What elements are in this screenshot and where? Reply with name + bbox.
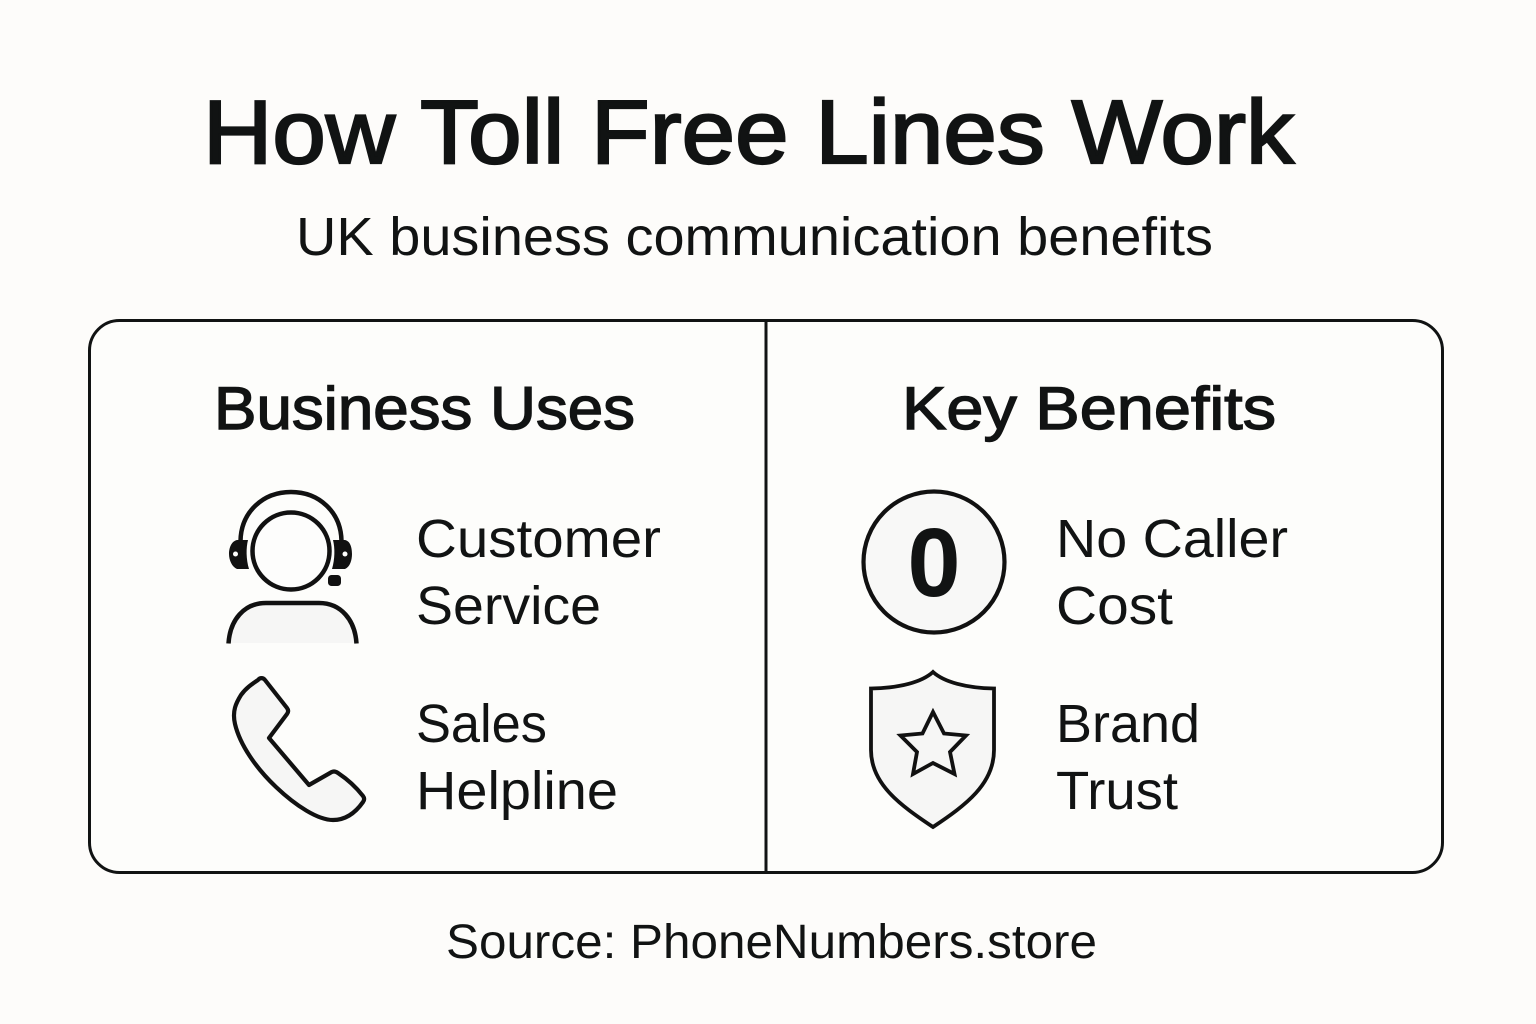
subtitle: UK business communication benefits: [296, 207, 1213, 267]
panel: comparison card: [90, 320, 1442, 873]
heading: business uses: Business Uses: [214, 375, 635, 442]
label: brand trust: Trust: [1056, 761, 1178, 821]
icon: telephone handset: [234, 678, 364, 820]
label: sales helpline: [416, 694, 618, 821]
icon: zero cost circle: [864, 492, 1004, 632]
icon: shield with star: [871, 672, 994, 827]
label: customer service: [416, 509, 661, 636]
title: How Toll Free Lines Work: [203, 83, 1295, 183]
label: customer service: Service: [416, 576, 601, 636]
label: brand trust: Brand: [1056, 694, 1200, 754]
label: brand trust: [1056, 694, 1200, 821]
label: customer service: Customer: [416, 509, 661, 569]
icon: customer service agent with headset: [228, 492, 357, 644]
label: sales helpline: Sales: [416, 694, 547, 754]
label: no caller cost: [1056, 509, 1288, 636]
icon: zero cost circle: 0: [908, 508, 960, 617]
label: no caller cost: No Caller: [1056, 509, 1288, 569]
label: no caller cost: Cost: [1056, 576, 1173, 636]
label: sales helpline: Helpline: [416, 761, 618, 821]
heading: key benefits: Key Benefits: [902, 375, 1276, 442]
source footer: Source: PhoneNumbers.store: [446, 916, 1097, 969]
